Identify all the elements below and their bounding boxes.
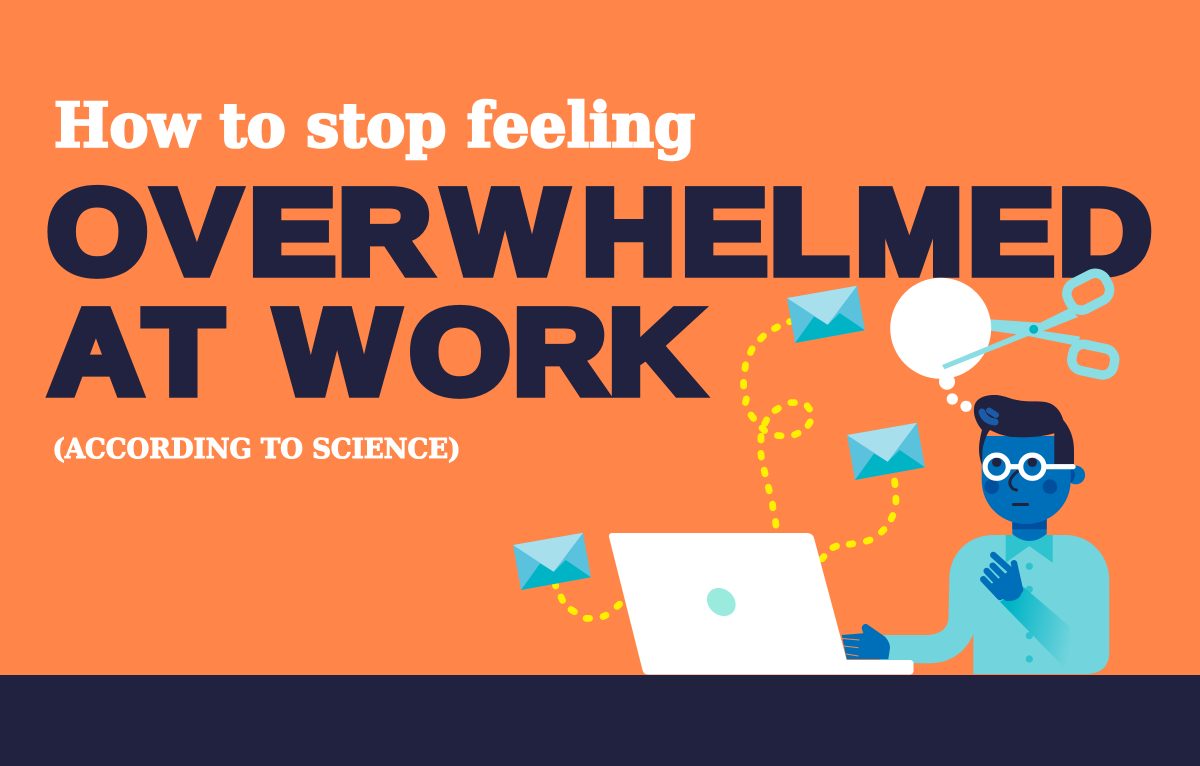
dotted path: top envelope to laptop: [744, 322, 810, 525]
laptop: [609, 533, 914, 674]
eyes: [992, 458, 1037, 467]
nose and mouth: [1010, 471, 1028, 504]
envelope: lower: [513, 533, 591, 590]
envelope: top: [787, 286, 865, 343]
collar: [1006, 535, 1053, 563]
shirt buttons: [1026, 563, 1033, 663]
lower hand: [842, 624, 890, 659]
heading: overwhelmed: OVERWHELMED: [47, 166, 1152, 299]
torso and arm: [880, 535, 1109, 674]
envelope: middle: [847, 423, 925, 480]
scissors blade and pivot: [942, 323, 1043, 369]
icon: scissors behind bubble: [985, 269, 1117, 377]
hair: [974, 395, 1074, 465]
dotted path: lower envelope to laptop: [555, 585, 620, 618]
dotted path: middle envelope to laptop: [822, 481, 896, 559]
heading: at work: AT WORK: [49, 286, 702, 419]
hair curl: [982, 410, 996, 422]
forearm: [1000, 587, 1070, 672]
heading: how to stop feeling: How to stop feeling: [54, 91, 695, 162]
laptop logo: [701, 582, 741, 622]
subheading: according to science: (ACCORDING TO SCIENCE): [52, 434, 460, 465]
face: [982, 436, 1071, 524]
ground band: [0, 675, 1200, 766]
glasses: [985, 455, 1073, 478]
thought bubble: [890, 278, 991, 412]
person: [842, 395, 1109, 674]
raised hand: [983, 555, 1022, 601]
ear: [1066, 466, 1085, 484]
neck: [1012, 515, 1047, 541]
cheeks: [984, 479, 1057, 494]
